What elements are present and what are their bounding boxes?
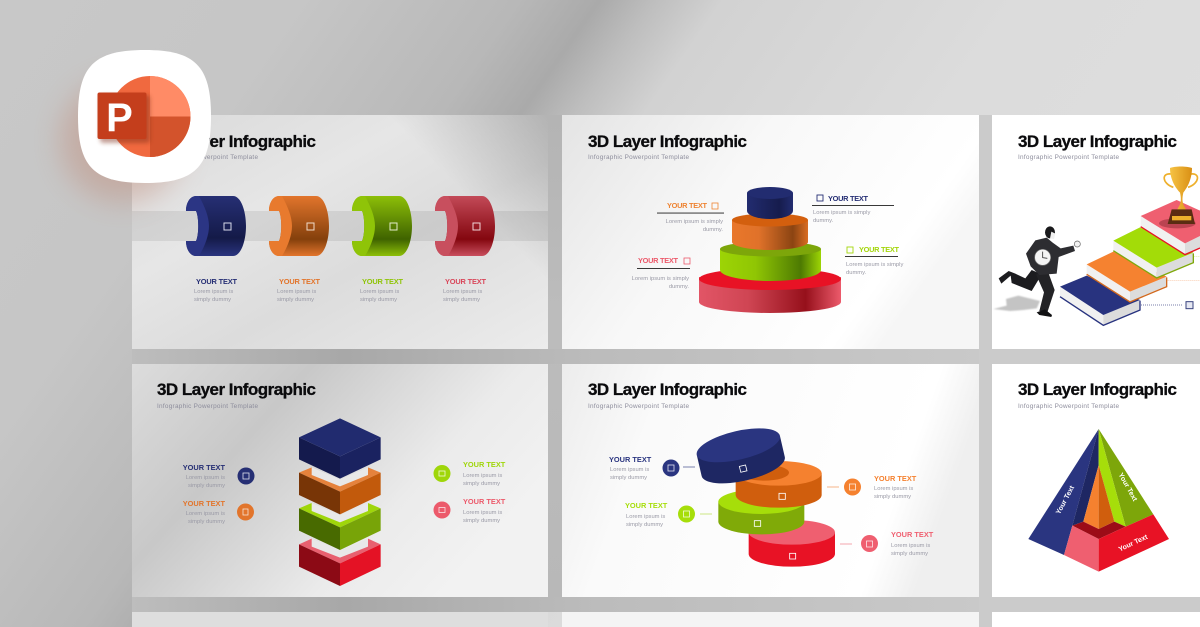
disc: green [718, 489, 804, 534]
icon: building [1186, 302, 1193, 309]
callout: navy: Lorem ipsum is simply [813, 210, 870, 216]
callout: green [625, 501, 712, 528]
callout: navy: Lorem ipsum is [610, 467, 649, 473]
callout: navy: YOUR TEXT [183, 463, 225, 472]
logo square [98, 92, 146, 139]
callout: green: Lorem ipsum is [626, 514, 665, 520]
subtitle: Infographic Powerpoint Template [588, 154, 689, 161]
callout: navy: YOUR TEXT [609, 455, 652, 464]
block: green [299, 503, 381, 550]
block: navy [299, 418, 381, 479]
panel: tilted discs [562, 364, 979, 597]
subtitle: Infographic Powerpoint Template [1018, 403, 1119, 410]
callout: orange: Lorem ipsum is [874, 486, 913, 492]
callout: pink [434, 497, 506, 524]
title: 3D Layer Infographic [157, 132, 316, 151]
callout: green: dummy. [846, 270, 867, 276]
callout: pink: Lorem ipsum is [463, 510, 502, 516]
stacked iso blocks [299, 418, 381, 586]
callout: pink [632, 256, 690, 290]
book: navy [1060, 276, 1140, 325]
callout: orange [183, 499, 254, 525]
partial panels: bottom row [132, 612, 1200, 627]
title: 3D Layer Infographic [588, 132, 747, 151]
disc: orange [736, 461, 822, 508]
callout: navy: YOUR TEXT [828, 194, 868, 203]
labels: simply dummy [194, 297, 231, 303]
title: 3D Layer Infographic [1018, 380, 1177, 399]
disc: navy [694, 422, 788, 490]
subtitle: Infographic Powerpoint Template [157, 403, 258, 410]
panel: cylinder row [132, 115, 548, 349]
cylinder: navy [186, 196, 246, 256]
panel: stacked cylinders [562, 115, 979, 349]
callout: pink: YOUR TEXT [891, 530, 934, 539]
labels: YOUR TEXT [445, 277, 486, 286]
labels: YOUR TEXT [279, 277, 320, 286]
icon: navy disc [739, 465, 747, 472]
callout: pink: YOUR TEXT [638, 256, 678, 265]
logo circle [100, 76, 190, 157]
disc: red [749, 520, 835, 567]
callout: navy: dummy. [813, 218, 834, 224]
labels: Lorem ipsum is [194, 289, 233, 295]
callout: orange: YOUR TEXT [667, 201, 707, 210]
callout: pink: Lorem ipsum is simply [632, 276, 689, 282]
callout: green: YOUR TEXT [625, 501, 668, 510]
callout: green: Lorem ipsum is simply [846, 262, 903, 268]
callout: orange: dummy. [703, 227, 723, 233]
grey band [132, 211, 548, 241]
labels: Lorem ipsum is [443, 289, 482, 295]
callout: pink: YOUR TEXT [463, 497, 506, 506]
block: orange [299, 467, 381, 514]
callout: green: simply dummy [626, 522, 663, 528]
book stairs illustration [1060, 200, 1200, 325]
callout: navy [609, 455, 695, 481]
panel: book stairs [992, 115, 1200, 349]
cylinder: green [352, 196, 412, 256]
disc stack [694, 422, 835, 567]
dotted connectors [1141, 257, 1200, 305]
callout: green: simply dummy [463, 481, 500, 487]
pyramid chart [1028, 429, 1169, 572]
title: 3D Layer Infographic [157, 380, 316, 399]
subtitle: Infographic Powerpoint Template [157, 154, 258, 161]
labels: simply dummy [360, 297, 397, 303]
callout: orange: YOUR TEXT [183, 499, 225, 508]
callout: orange [657, 201, 724, 233]
logo letter: P [106, 96, 133, 140]
labels [194, 277, 486, 303]
callout: pink: simply dummy [463, 518, 500, 524]
tiered cylinder chart [699, 187, 841, 313]
callout: orange: simply dummy [188, 519, 225, 525]
panel: pyramid [992, 364, 1200, 597]
labels: simply dummy [277, 297, 314, 303]
panel: isometric blocks [132, 364, 548, 597]
callout: green: YOUR TEXT [463, 460, 506, 469]
cylinder: red [435, 196, 495, 256]
labels: YOUR TEXT [196, 277, 237, 286]
labels: YOUR TEXT [362, 277, 403, 286]
panel shading [132, 115, 548, 349]
callout: orange [827, 474, 917, 500]
callout: navy [183, 463, 254, 489]
title: 3D Layer Infographic [1018, 132, 1177, 151]
book: green [1113, 227, 1193, 278]
pyramid label: navy: Your Text [1055, 484, 1076, 516]
subtitle: Infographic Powerpoint Template [1018, 154, 1119, 161]
callout: pink: simply dummy [891, 551, 928, 557]
callout: navy: simply dummy [610, 475, 647, 481]
callout: green [434, 460, 506, 487]
callout: navy: simply dummy [188, 483, 225, 489]
cylinder: orange [269, 196, 329, 256]
book: pink [1141, 200, 1200, 255]
callout: green: YOUR TEXT [859, 245, 899, 254]
title: 3D Layer Infographic [588, 380, 747, 399]
callout: orange: simply dummy [874, 494, 911, 500]
labels: Lorem ipsum is [360, 289, 399, 295]
labels: simply dummy [443, 297, 480, 303]
trophy [1159, 166, 1197, 228]
block: red [299, 539, 381, 586]
callout: green [845, 245, 903, 276]
book: orange [1087, 252, 1167, 302]
callout: pink: Lorem ipsum is [891, 543, 930, 549]
callout: orange: Lorem ipsum is simply [666, 219, 723, 225]
callout: navy: Lorem ipsum is [186, 475, 225, 481]
pyramid label: red: Your Text [1118, 534, 1150, 553]
callout: navy [812, 194, 894, 224]
labels: Lorem ipsum is [277, 289, 316, 295]
pyramid label: green: Your Text [1117, 472, 1138, 503]
man running [993, 226, 1080, 317]
callout: orange: Lorem ipsum is [186, 511, 225, 517]
icon: PowerPoint app badge [60, 50, 211, 202]
callout: orange: YOUR TEXT [874, 474, 917, 483]
callout: pink [840, 530, 934, 557]
callout: pink: dummy. [669, 284, 689, 290]
subtitle: Infographic Powerpoint Template [588, 403, 689, 410]
callout: green: Lorem ipsum is [463, 473, 502, 479]
